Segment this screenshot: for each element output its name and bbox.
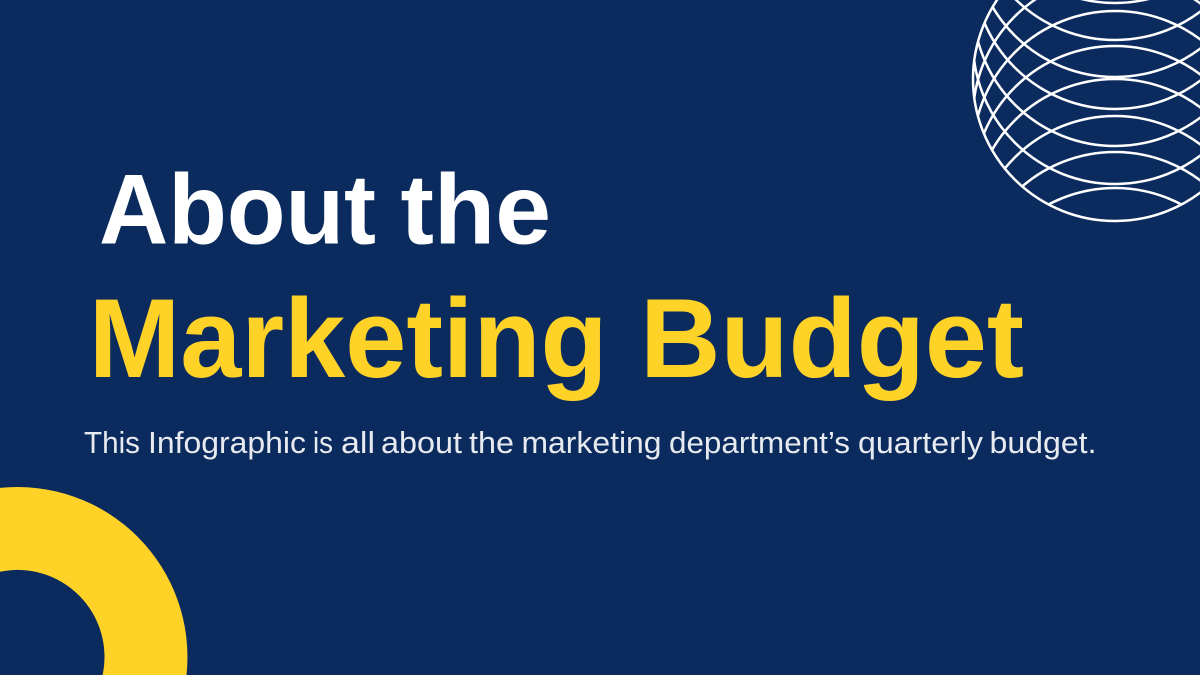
subtitle: department’s [669,426,850,460]
title: Marketing Budget [89,276,1024,401]
subtitle: marketing [522,426,662,460]
title: About the [99,154,551,264]
subtitle [84,426,1096,460]
title: About the: About [99,154,376,264]
subtitle: quarterly [858,426,984,460]
title: About the: the [400,154,551,264]
title: Marketing Budget: Budget [640,276,1024,401]
icon: wireframe globe [972,0,1200,222]
subtitle: is [313,426,333,460]
subtitle: budget. [990,426,1096,460]
title: Marketing Budget: Marketing [89,276,608,401]
subtitle: about [381,426,463,460]
subtitle: all [341,426,375,460]
icon: yellow ring [0,487,187,675]
subtitle: This [84,426,140,460]
subtitle: the [469,426,514,460]
subtitle: Infographic [148,426,306,460]
